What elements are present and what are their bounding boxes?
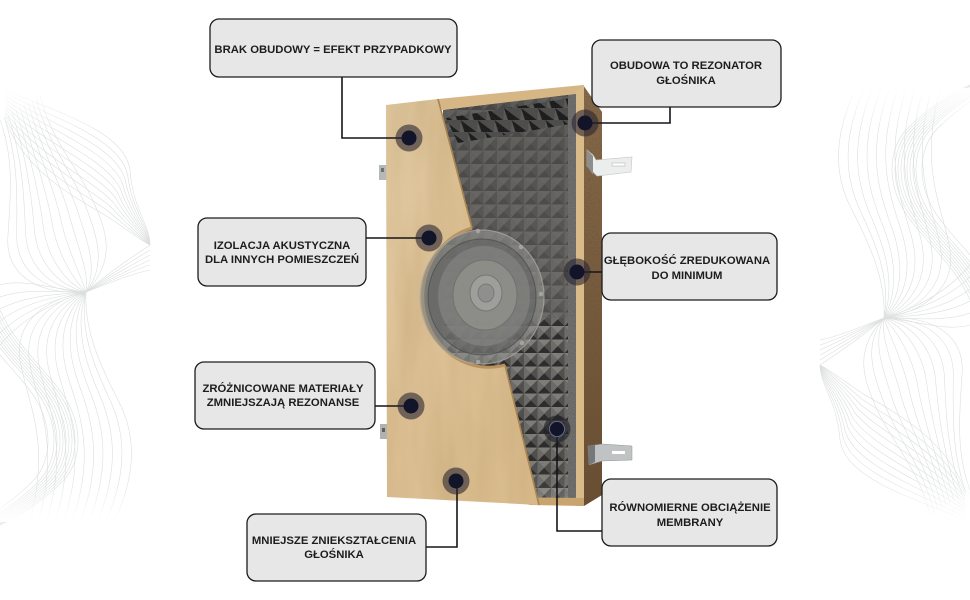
mounting bracket: upper left: [379, 165, 387, 180]
hotspot: top left panel: [396, 124, 422, 152]
callout: obciążenie: [602, 479, 777, 546]
acoustic foam: [443, 93, 577, 498]
callout: obciążenie: RÓWNOMIERNE OBCIĄŻENIE: [609, 501, 771, 514]
cabinet right edge: [576, 85, 584, 506]
callout: rezonator: OBUDOWA TO REZONATOR: [610, 60, 762, 72]
speaker cabinet illustration: [379, 85, 632, 506]
callout: zniekształcenia: GŁOŚNIKA: [304, 548, 364, 561]
callout: materiały: [195, 362, 375, 429]
cabinet side panel: [583, 85, 602, 506]
dark cavity behind speaker: [416, 226, 548, 368]
front wooden panel: [386, 99, 539, 505]
callout: materiały: ZRÓŻNICOWANE MATERIAŁY: [202, 382, 364, 395]
callout: głębokość: [602, 233, 777, 300]
callout: izolacja: IZOLACJA AKUSTYCZNA: [214, 240, 350, 252]
hotspot: panel lower left: [398, 392, 424, 420]
callout: zniekształcenia: [247, 514, 426, 581]
loudspeaker driver: [420, 229, 544, 364]
background wave lines: left: [0, 85, 160, 525]
callout: izolacja: DLA INNYCH POMIESZCZEŃ: [205, 253, 359, 266]
mounting bracket: upper right: [587, 150, 632, 176]
hotspot: cabinet depth: [564, 258, 590, 286]
callout: rezonator: GŁOŚNIKA: [656, 74, 716, 87]
hotspot: panel bottom: [442, 468, 470, 494]
callout: głębokość: DO MINIMUM: [652, 270, 722, 282]
callout: rezonator: [592, 40, 781, 107]
callout: głębokość: GŁĘBOKOŚĆ ZREDUKOWANA: [604, 254, 770, 267]
hotspot: panel middle: [416, 224, 442, 252]
callout: izolacja: [198, 218, 366, 286]
callout: zniekształcenia: MNIEJSZE ZNIEKSZTAŁCENIA: [252, 535, 416, 547]
mounting bracket: lower right: [588, 444, 632, 465]
hotspot: top right corner: [572, 110, 598, 136]
connector lines: [342, 77, 670, 547]
callout: materiały: ZMNIEJSZAJĄ REZONANSE: [207, 397, 360, 409]
callout: obciążenie: MEMBRANY: [657, 517, 724, 529]
mounting bracket: lower left: [380, 424, 387, 439]
background wave lines: right: [810, 85, 970, 525]
callout: brak obudowy: BRAK OBUDOWY = EFEKT PRZYPADKOWY: [214, 44, 452, 56]
callout: brak obudowy: [210, 19, 457, 77]
cabinet bottom edge: [500, 497, 584, 506]
hotspot: foam: [544, 416, 570, 442]
cabinet top edge: [438, 85, 584, 110]
